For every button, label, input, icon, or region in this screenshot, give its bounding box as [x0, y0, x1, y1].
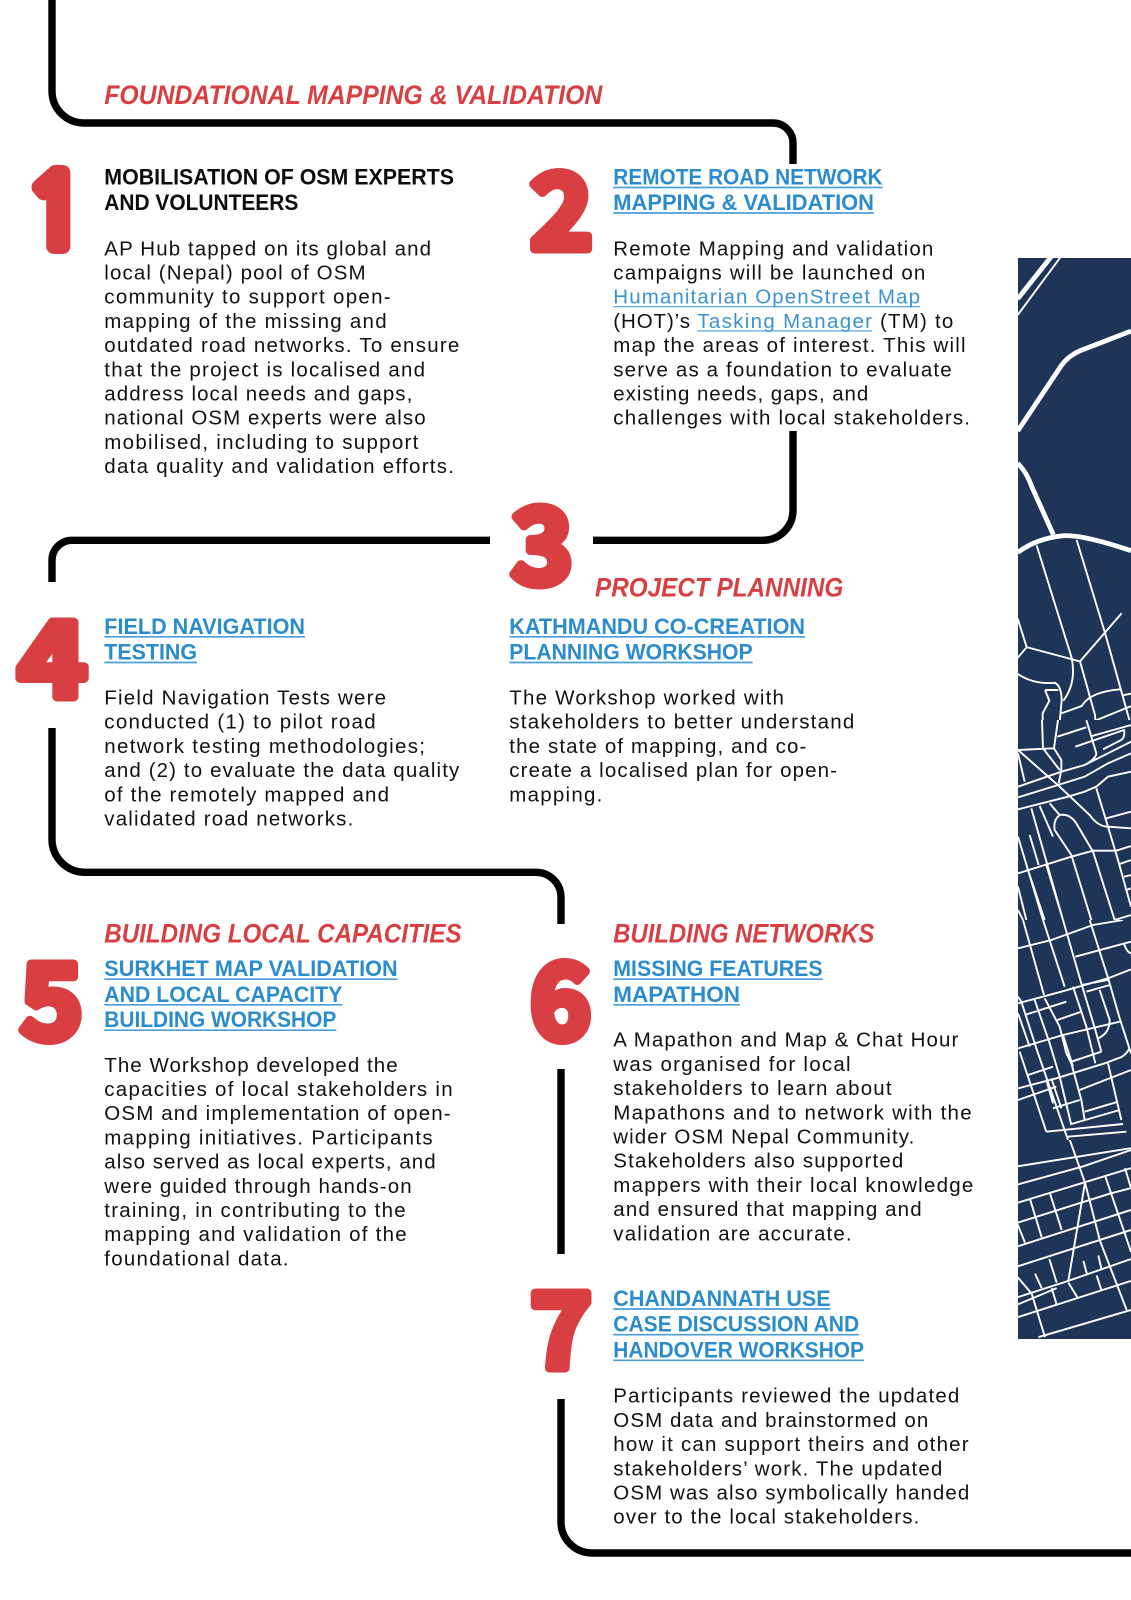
- step 7: Chandannath workshop text block: CASE DISCUSSION AND: [613, 1312, 859, 1337]
- step 1 numeral: 1: [25, 163, 87, 262]
- step 2: remote road network text block: existing needs, gaps, and: [613, 382, 868, 406]
- step 7: Chandannath workshop text block: [613, 1286, 969, 1529]
- step 6: missing features mapathon text block: was organised for local: [612, 1053, 851, 1076]
- step 4: field navigation text block: FIELD NAVIGATION: [104, 614, 305, 639]
- step 7: Chandannath workshop text block: OSM data and brainstormed on: [613, 1409, 928, 1432]
- connector line: step 6 to step 7: [557, 1069, 565, 1254]
- step 2: remote road network text block: Remote Mapping and validation: [613, 237, 933, 260]
- step 2: remote road network text block: REMOTE ROAD NETWORK: [613, 164, 883, 190]
- step 6: missing features mapathon text block: [612, 956, 973, 1245]
- connector line: step 2 to step 3: [593, 431, 793, 540]
- step 1: mobilisation text block: AND VOLUNTEERS: [104, 190, 298, 215]
- section heading: foundational mapping: FOUNDATIONAL MAPPING & VALIDATION: [104, 80, 603, 110]
- step 3 numeral: 3: [511, 462, 573, 614]
- step 2: remote road network text block: MAPPING & VALIDATION: [613, 190, 874, 215]
- step 2: remote road network text block: (HOT)’s: [613, 310, 690, 333]
- step 1: mobilisation text block: AP Hub tapped on its global and: [104, 237, 431, 260]
- step 4: field navigation text block: TESTING: [104, 640, 197, 664]
- step 1: mobilisation text block: MOBILISATION OF OSM EXPERTS: [104, 164, 454, 190]
- step 4: field navigation text block: [104, 614, 460, 830]
- step 6 numeral: 6: [530, 918, 591, 1069]
- step 1: mobilisation text block: that the project is localised and: [104, 358, 425, 381]
- step 4: field navigation text block: of the remotely mapped and: [104, 783, 389, 806]
- step 5 numeral: 5: [20, 918, 83, 1069]
- step 4 numeral: 4: [18, 576, 87, 727]
- step 4: field navigation text block: conducted (1) to pilot road: [104, 711, 376, 734]
- step 1: mobilisation text block: mapping of the missing and: [104, 310, 387, 333]
- step 5: Surkhet workshop text block: mapping initiatives. Participants: [104, 1126, 433, 1149]
- step 2: remote road network text block: campaigns will be launched on: [613, 262, 925, 284]
- step 6: missing features mapathon text block: MAPATHON: [613, 982, 740, 1007]
- step 1: mobilisation text block: mobilised, including to support: [104, 431, 419, 454]
- step 6: missing features mapathon text block: validation are accurate.: [613, 1222, 852, 1245]
- step 1: mobilisation text block: data quality and validation efforts.: [104, 455, 454, 478]
- step 5: Surkhet workshop text block: BUILDING WORKSHOP: [104, 1007, 336, 1032]
- step 1: mobilisation text block: community to support open-: [104, 286, 391, 309]
- step 7: Chandannath workshop text block: OSM was also symbolically handed: [613, 1482, 969, 1504]
- step 7: Chandannath workshop text block: CHANDANNATH USE: [613, 1286, 831, 1311]
- step 6: missing features mapathon text block: A Mapathon and Map & Chat Hour: [613, 1029, 958, 1052]
- step 2 numeral: 2: [530, 128, 593, 279]
- step 5: Surkhet workshop text block: SURKHET MAP VALIDATION: [104, 956, 398, 981]
- step 5: Surkhet workshop text block: AND LOCAL CAPACITY: [104, 982, 342, 1007]
- section heading: building networks: BUILDING NETWORKS: [613, 919, 875, 949]
- step 6: missing features mapathon text block: mappers with their local knowledge: [613, 1174, 973, 1197]
- step 5: Surkhet workshop text block: mapping and validation of the: [104, 1223, 407, 1246]
- step 1: mobilisation text block: local (Nepal) pool of OSM: [104, 262, 366, 284]
- step 5: Surkhet workshop text block: capacities of local stakeholders in: [104, 1078, 453, 1101]
- step 3: Kathmandu workshop text block: [509, 614, 854, 806]
- step 7: Chandannath workshop text block: stakeholders’ work. The updated: [613, 1457, 942, 1480]
- step 3: Kathmandu workshop text block: KATHMANDU CO-CREATION: [509, 614, 805, 639]
- step 1: mobilisation text block: outdated road networks. To ensure: [104, 334, 459, 357]
- step 6: missing features mapathon text block: Mapathons and to network with the: [613, 1101, 972, 1124]
- step 5: Surkhet workshop text block: were guided through hands-on: [103, 1175, 412, 1198]
- map panel: [1018, 256, 1131, 1339]
- step 5: Surkhet workshop text block: The Workshop developed the: [104, 1054, 398, 1077]
- step 7: Chandannath workshop text block: Participants reviewed the updated: [613, 1385, 959, 1408]
- step 2: remote road network text block: challenges with local stakeholders.: [613, 407, 970, 430]
- connector line: top to step 2: [52, 0, 793, 164]
- step 2: remote road network text block: (TM) to: [880, 310, 953, 333]
- connector line: step 7 to page edge: [561, 1399, 1131, 1553]
- step 6: missing features mapathon text block: MISSING FEATURES: [613, 956, 823, 981]
- step 2: remote road network text block: Humanitarian OpenStreet Map: [613, 286, 920, 309]
- step 5: Surkhet workshop text block: training, in contributing to the: [104, 1199, 406, 1222]
- step 1: mobilisation text block: national OSM experts were also: [104, 407, 426, 430]
- step 4: field navigation text block: validated road networks.: [104, 808, 353, 830]
- step 2: remote road network text block: map the areas of interest. This will: [613, 334, 966, 357]
- step 7: Chandannath workshop text block: HANDOVER WORKSHOP: [613, 1337, 864, 1362]
- step 6: missing features mapathon text block: and ensured that mapping and: [613, 1198, 922, 1221]
- step 5: Surkhet workshop text block: foundational data.: [104, 1247, 289, 1270]
- step 3: Kathmandu workshop text block: mapping.: [509, 783, 602, 806]
- step 7 numeral: 7: [530, 1247, 592, 1398]
- step 2: remote road network text block: serve as a foundation to evaluate: [613, 358, 952, 381]
- step 5: Surkhet workshop text block: OSM and implementation of open-: [104, 1102, 451, 1125]
- step 3: Kathmandu workshop text block: create a localised plan for open-: [509, 759, 837, 782]
- step 1: mobilisation text block: address local needs and gaps,: [104, 382, 412, 406]
- section heading: project planning: PROJECT PLANNING: [595, 573, 843, 603]
- step 3: Kathmandu workshop text block: PLANNING WORKSHOP: [509, 640, 753, 664]
- step 4: field navigation text block: Field Navigation Tests were: [104, 686, 386, 710]
- step 4: field navigation text block: network testing methodologies;: [104, 735, 425, 758]
- step 7: Chandannath workshop text block: over to the local stakeholders.: [613, 1506, 919, 1529]
- step 7: Chandannath workshop text block: how it can support theirs and other: [613, 1433, 969, 1456]
- step 6: missing features mapathon text block: Stakeholders also supported: [613, 1150, 903, 1173]
- step 1: mobilisation text block: [104, 164, 459, 478]
- connector line: step 4 to step 6: [52, 728, 561, 924]
- connector line: step 3 to step 4: [52, 540, 490, 582]
- step 6: missing features mapathon text block: stakeholders to learn about: [613, 1077, 892, 1100]
- step 5: Surkhet workshop text block: [103, 956, 453, 1270]
- section heading: building local capacities: BUILDING LOCAL CAPACITIES: [104, 919, 462, 949]
- step 2: remote road network text block: Tasking Manager: [697, 310, 872, 333]
- step 2: remote road network text block: [613, 164, 970, 430]
- step 3: Kathmandu workshop text block: The Workshop worked with: [509, 686, 784, 710]
- step 5: Surkhet workshop text block: also served as local experts, and: [104, 1151, 436, 1174]
- step 6: missing features mapathon text block: wider OSM Nepal Community.: [612, 1126, 914, 1148]
- step 4: field navigation text block: and (2) to evaluate the data quality: [104, 759, 460, 782]
- step 3: Kathmandu workshop text block: the state of mapping, and co-: [509, 735, 806, 758]
- step 3: Kathmandu workshop text block: stakeholders to better understand: [509, 711, 854, 734]
